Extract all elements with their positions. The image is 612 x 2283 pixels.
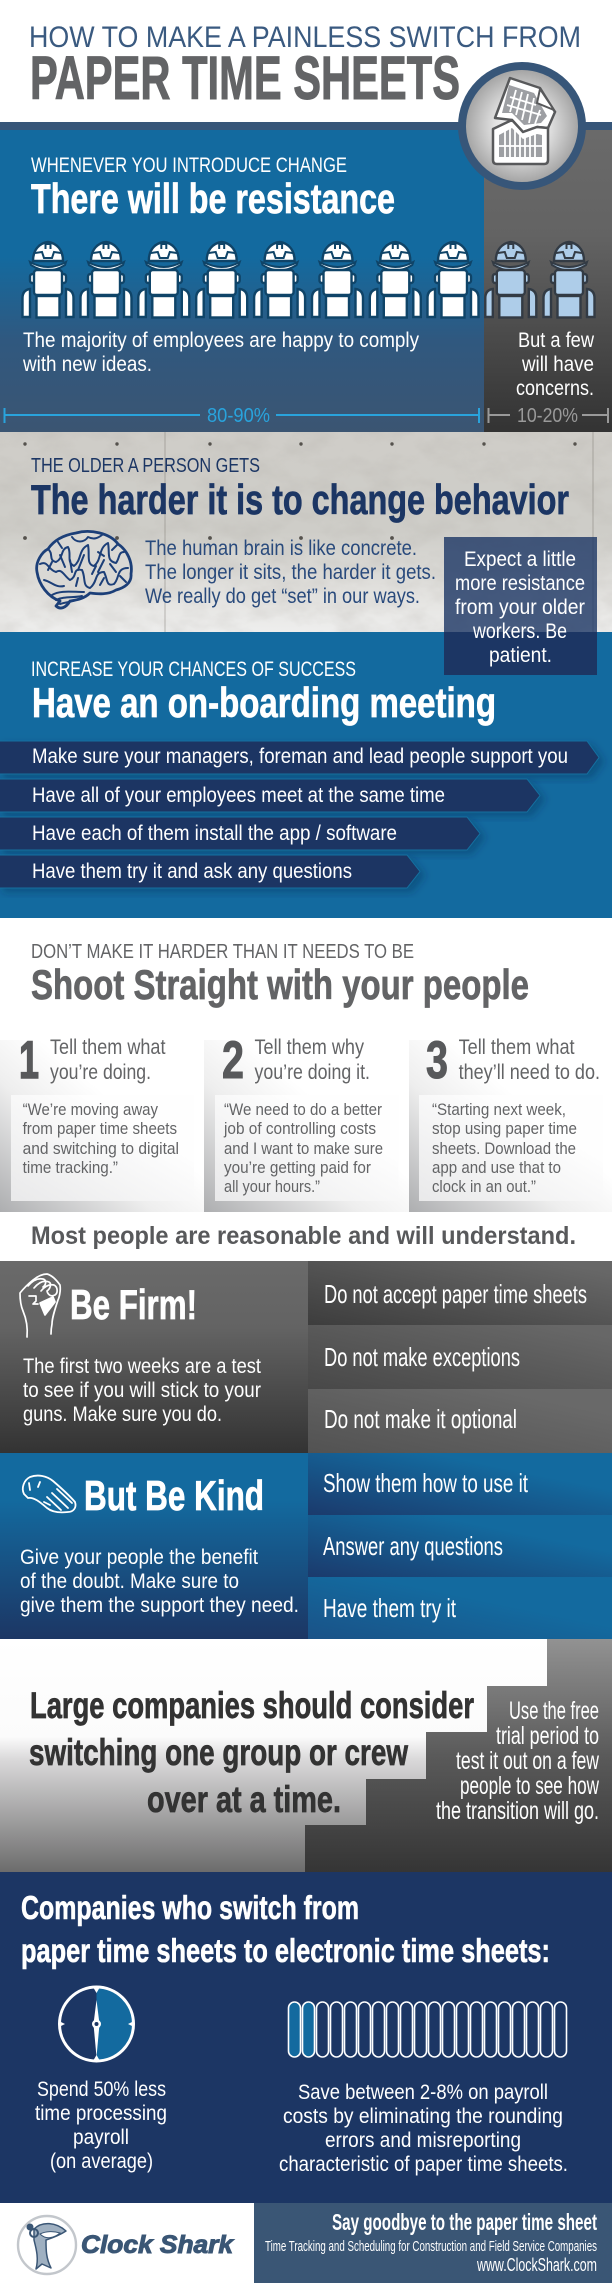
step 2: you’re getting paid for bbox=[224, 1158, 371, 1177]
panel: header bbox=[0, 0, 612, 122]
text: firm description: The first two weeks are a test bbox=[23, 1355, 261, 1378]
text: a few: will have bbox=[521, 353, 594, 376]
step 3: stop using paper time bbox=[432, 1119, 577, 1138]
text: kind description: give them the support they need. bbox=[20, 1594, 299, 1617]
list: kind actions: Have them try it bbox=[323, 1593, 457, 1623]
step 3: sheets. Download the bbox=[432, 1139, 576, 1158]
section heading: There will be resistance bbox=[31, 175, 395, 222]
chart: percent pills bbox=[288, 2002, 566, 2057]
bracket: 80-90%: 80-90% bbox=[207, 405, 270, 427]
callout: expect resistance bbox=[444, 537, 597, 675]
text: concrete: The human brain is like concrete. bbox=[145, 537, 417, 560]
arrow: questions bbox=[0, 855, 420, 888]
text: firm description bbox=[23, 1355, 261, 1426]
logo wordmark: Clock Shark bbox=[81, 2231, 234, 2259]
text: kind description bbox=[20, 1546, 299, 1617]
text: firm description: guns. Make sure you do. bbox=[23, 1403, 222, 1426]
step 1: time tracking.” bbox=[23, 1158, 118, 1177]
bracket: 10-20%: 10-20% bbox=[517, 405, 578, 427]
step 1: you’re doing. bbox=[50, 1061, 151, 1084]
step 1 bbox=[0, 1031, 204, 1212]
section kicker: WHENEVER YOU INTRODUCE CHANGE bbox=[31, 154, 347, 177]
list: kind actions: Answer any questions bbox=[323, 1531, 503, 1561]
text: a few bbox=[516, 329, 595, 400]
icons: workers row bbox=[22, 242, 594, 318]
arrow: install bbox=[0, 817, 480, 850]
step 1: Tell them what bbox=[50, 1036, 166, 1059]
text: concrete bbox=[145, 537, 436, 608]
text: majority: with new ideas. bbox=[22, 353, 152, 376]
list: firm rules: Do not make it optional bbox=[324, 1404, 517, 1434]
callout: expect resistance: workers. Be bbox=[472, 620, 567, 643]
section kicker: THE OLDER A PERSON GETS bbox=[31, 455, 260, 477]
icon: open hand bbox=[23, 1476, 76, 1512]
step 3: “Starting next week, bbox=[432, 1100, 566, 1119]
bracket: 80-90% bbox=[4, 405, 479, 427]
text: 50 percent less: time processing bbox=[35, 2102, 167, 2125]
panel: on-boarding meeting bbox=[0, 632, 612, 918]
text: majority bbox=[22, 329, 419, 376]
step 2: “We need to do a better bbox=[224, 1100, 382, 1119]
panel: be firm bbox=[0, 1261, 612, 1453]
heading: companies who switch bbox=[21, 1889, 550, 1969]
arrow: install: Have each of them install the app / software bbox=[32, 822, 397, 845]
text: payroll savings: errors and misreporting bbox=[325, 2129, 521, 2152]
text: majority: The majority of employees are happy to comply bbox=[23, 329, 419, 352]
text: consider switching: over at a time. bbox=[147, 1779, 341, 1820]
panel: shoot straight bbox=[0, 918, 612, 1261]
step 3: app and use that to bbox=[432, 1158, 561, 1177]
list: kind actions: Show them how to use it bbox=[323, 1468, 529, 1498]
text: payroll savings: characteristic of paper time sheets. bbox=[279, 2153, 568, 2176]
text: firm description: to see if you will stick to your bbox=[23, 1379, 261, 1402]
text: 50 percent less: Spend 50% less bbox=[37, 2078, 166, 2101]
stairs bbox=[305, 1639, 612, 1872]
text: concrete: The longer it sits, the harder it gets. bbox=[145, 561, 436, 584]
list: kind actions bbox=[323, 1468, 529, 1623]
step 1: 1 bbox=[19, 1031, 39, 1090]
heading: be firm: Be Firm! bbox=[70, 1281, 197, 1328]
step 1: and switching to digital bbox=[23, 1139, 179, 1158]
step 3 bbox=[409, 1031, 612, 1212]
text: 50 percent less bbox=[35, 2078, 167, 2173]
text: consider switching: switching one group or crew bbox=[29, 1732, 408, 1773]
text: free trial bbox=[436, 1697, 600, 1825]
text: 50 percent less: (on average) bbox=[50, 2150, 153, 2173]
step 3: clock in an out.” bbox=[432, 1177, 536, 1196]
step 2: 2 bbox=[222, 1031, 244, 1090]
icon: fist bbox=[20, 1274, 60, 1337]
step 1: from paper time sheets bbox=[23, 1119, 177, 1138]
arrow: questions: Have them try it and ask any questions bbox=[32, 860, 352, 883]
icon: torn time sheet badge bbox=[462, 66, 582, 186]
logo: clock shark bbox=[18, 2216, 234, 2274]
text: consider switching bbox=[29, 1685, 474, 1820]
step 3: 3 bbox=[426, 1031, 448, 1090]
text: 50 percent less: payroll bbox=[73, 2126, 129, 2149]
text: payroll savings: costs by eliminating the rounding bbox=[283, 2105, 563, 2128]
step 1: “We’re moving away bbox=[23, 1100, 158, 1119]
arrow: employees: Have all of your employees meet at the same time bbox=[32, 784, 445, 807]
heading: but be kind: But Be Kind bbox=[84, 1472, 264, 1519]
step 2: all your hours.” bbox=[224, 1177, 320, 1196]
text: a few: concerns. bbox=[516, 377, 594, 400]
text: payroll savings: Save between 2-8% on payroll bbox=[298, 2081, 548, 2104]
text: kind description: Give your people the benefit bbox=[20, 1546, 258, 1569]
arrow: employees bbox=[0, 779, 540, 812]
panel: older workers bbox=[0, 432, 612, 632]
text: kind description: of the doubt. Make sure to bbox=[20, 1570, 239, 1593]
text: concrete: We really do get “set” in our ways. bbox=[145, 585, 420, 608]
panel: large companies bbox=[0, 1639, 612, 1872]
list: firm rules bbox=[324, 1279, 587, 1434]
text: a few: But a few bbox=[518, 329, 595, 352]
list: firm rules: Do not make exceptions bbox=[324, 1342, 520, 1372]
step 2: and I want to make sure bbox=[224, 1139, 383, 1158]
section heading: Have an on-boarding meeting bbox=[32, 679, 496, 726]
icon: half clock bbox=[59, 1987, 134, 2061]
callout: expect resistance: from your older bbox=[455, 596, 585, 619]
text: payroll savings bbox=[279, 2081, 568, 2176]
callout: expect resistance: patient. bbox=[489, 644, 552, 667]
step 2: job of controlling costs bbox=[223, 1119, 376, 1138]
section kicker: DON’T MAKE IT HARDER THAN IT NEEDS TO BE bbox=[31, 941, 414, 963]
arrow: managers bbox=[0, 741, 599, 774]
heading: companies who switch: Companies who switch from bbox=[21, 1889, 359, 1926]
footer text bbox=[265, 2209, 597, 2275]
callout: expect resistance: more resistance bbox=[455, 572, 585, 595]
footer bbox=[0, 2203, 612, 2283]
step 2: you’re doing it. bbox=[254, 1061, 370, 1084]
bracket: 10-20% bbox=[488, 405, 608, 427]
panel: resistance bbox=[0, 122, 612, 432]
step 2: Tell them why bbox=[254, 1036, 364, 1059]
section kicker: INCREASE YOUR CHANCES OF SUCCESS bbox=[31, 658, 356, 681]
panel: but be kind bbox=[0, 1453, 612, 1639]
callout: expect resistance: Expect a little bbox=[464, 548, 576, 571]
step 3: Tell them what bbox=[459, 1036, 575, 1059]
icon: brain bbox=[37, 531, 131, 608]
panel: results bbox=[0, 1872, 612, 2203]
text: reasonable: Most people are reasonable and will understand. bbox=[31, 1222, 576, 1250]
step 2 bbox=[204, 1031, 409, 1212]
